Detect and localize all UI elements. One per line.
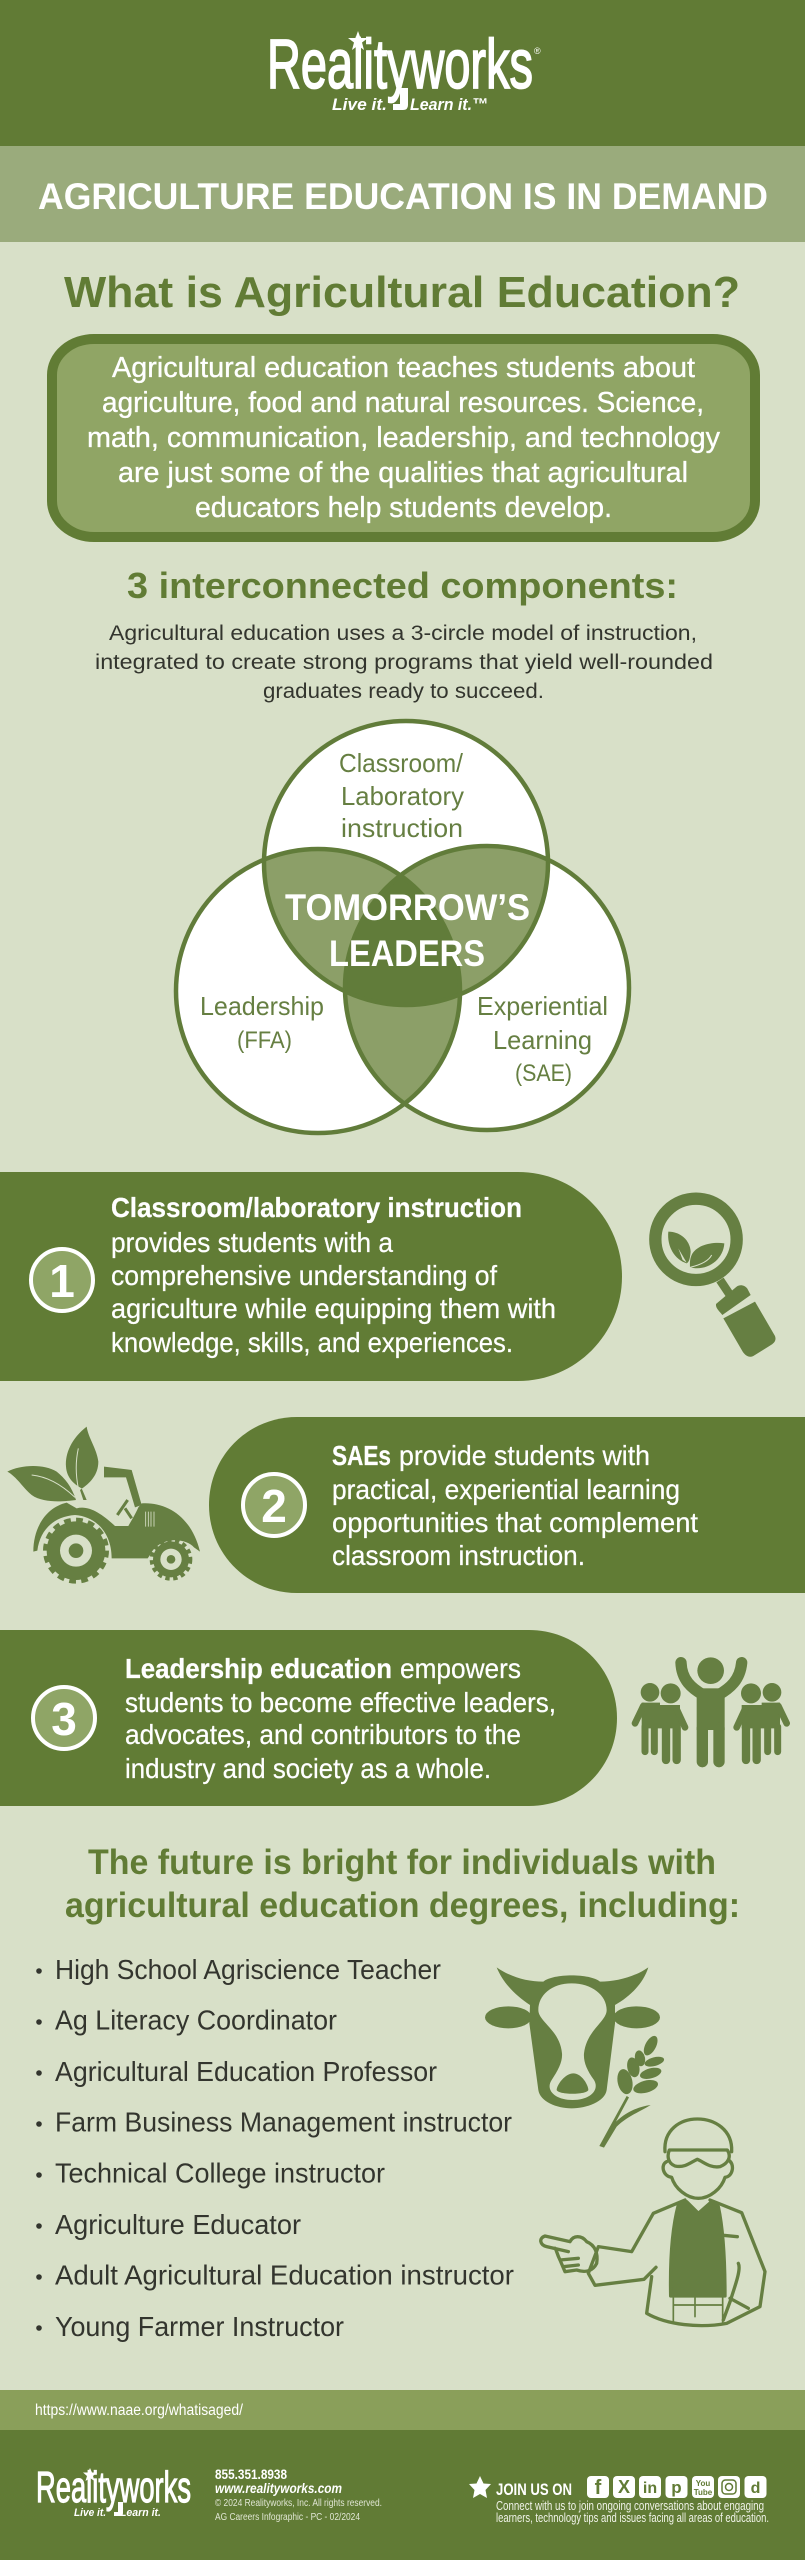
panel: step 2 (209, 1417, 805, 1593)
step 2 text: opportunities that complement (332, 1507, 698, 1538)
number badge 1: 1 (49, 1255, 75, 1307)
career list: Ag Literacy Coordinator (55, 2004, 337, 2036)
components intro text (95, 621, 713, 703)
social icons (587, 2476, 766, 2499)
logo: Realityworks: Learn it.™ (410, 95, 488, 114)
footer contact (215, 2466, 382, 2523)
icon: tractor with leaves (7, 1427, 200, 1581)
venn label: classroom: instruction (341, 813, 463, 843)
components intro text: integrated to create strong programs that yield well-rounded (95, 650, 713, 674)
footer (0, 2430, 805, 2560)
number badge 2: 2 (261, 1480, 287, 1532)
social icons: in (643, 2480, 657, 2497)
career list: Adult Agricultural Education instructor (55, 2260, 514, 2290)
step 1 text (111, 1192, 556, 1358)
step 2 text: practical, experiential learning (332, 1474, 680, 1505)
definition text: math, communication, leadership, and technology (87, 422, 720, 454)
number badge 3 (33, 1687, 95, 1749)
venn centre label (285, 887, 530, 974)
social icons: f (595, 2477, 602, 2499)
step 3 text: empowers (400, 1653, 521, 1684)
step 2 text (332, 1440, 698, 1571)
footer logo: Live it. (74, 2507, 106, 2519)
step 3 text: Leadership education (125, 1653, 392, 1684)
step 3 text (125, 1653, 556, 1784)
step 3 text: students to become effective leaders, (125, 1687, 556, 1718)
social icons: p (671, 2478, 682, 2497)
footer contact: 855.351.8938 (215, 2466, 287, 2482)
step 1 text: comprehensive understanding of (111, 1260, 497, 1291)
heading: the future is bright: agricultural education degrees, including: (65, 1886, 740, 1925)
venn label: experiential learning: (SAE) (515, 1060, 572, 1087)
logo: Realityworks (267, 25, 541, 114)
career list: Farm Business Management instructor (55, 2106, 512, 2138)
join us label: JOIN US ON (496, 2480, 572, 2499)
venn label: classroom (339, 748, 464, 843)
source url: https://www.naae.org/whatisaged/ (35, 2402, 244, 2419)
venn label: classroom: Classroom/ (339, 748, 464, 778)
number badge 3: 3 (51, 1693, 77, 1745)
header band with logo (0, 0, 805, 146)
footer logo: Realityworks (36, 2463, 191, 2512)
step 3 text: advocates, and contributors to the (125, 1719, 521, 1750)
components intro text: graduates ready to succeed. (263, 679, 544, 703)
venn label: experiential learning: Experiential (477, 991, 608, 1021)
icon: group of people (635, 1657, 787, 1762)
icon: wheat stalk (599, 2034, 665, 2148)
career list: Agriculture Educator (55, 2209, 301, 2240)
source link band (0, 2390, 805, 2430)
heading: What is Agricultural Education: What is Agricultural Education? (64, 268, 740, 317)
venn label: leadership (200, 991, 324, 1054)
footer contact: AG Careers Infographic - PC - 02/2024 (215, 2512, 360, 2523)
definition text: are just some of the qualities that agricultural (118, 457, 688, 489)
social icons: Tube (694, 2488, 713, 2497)
logo: Realityworks: ® (534, 46, 541, 56)
venn label: classroom: Laboratory (341, 781, 464, 811)
definition text (87, 352, 720, 524)
social icons: You (696, 2479, 710, 2488)
venn label: experiential learning (477, 991, 608, 1087)
social icons: d (751, 2480, 760, 2497)
heading: 3 interconnected components: 3 interconnected components: (127, 565, 678, 606)
title band (0, 146, 805, 242)
footer contact: www.realityworks.com (215, 2480, 342, 2496)
step 2 text: classroom instruction. (332, 1540, 585, 1571)
icon: farmer with goggles pointing (541, 2119, 765, 2326)
number badge 2 (243, 1474, 305, 1536)
footer logo: Learn it. (120, 2507, 161, 2519)
footer contact: © 2024 Realityworks, Inc. All rights reserved. (215, 2498, 382, 2509)
venn label: leadership: Leadership (200, 991, 324, 1021)
venn centre label: LEADERS (329, 933, 485, 974)
definition text: educators help students develop. (195, 492, 612, 524)
career list: Young Farmer Instructor (55, 2311, 344, 2342)
join us text (496, 2499, 769, 2525)
venn centre label: TOMORROW’S (285, 887, 530, 928)
career list: Agricultural Education Professor (55, 2056, 437, 2087)
step 1 text: provides students with a (111, 1227, 393, 1258)
logo: Realityworks: Realityworks (267, 25, 533, 103)
footer logo (36, 2463, 191, 2519)
step 3 text: industry and society as a whole. (125, 1753, 491, 1784)
panel: definition box (52, 339, 755, 537)
heading: the future is bright: The future is bright for individuals with (88, 1843, 716, 1882)
career list: Technical College instructor (55, 2158, 385, 2188)
heading: the future is bright (65, 1843, 740, 1925)
main title: AGRICULTURE EDUCATION IS IN DEMAND (38, 176, 768, 217)
career list (36, 1954, 514, 2342)
icon: star (469, 2476, 491, 2498)
social icons: X (618, 2477, 630, 2497)
venn label: experiential learning: Learning (493, 1025, 592, 1055)
definition text: agriculture, food and natural resources. Science, (102, 387, 704, 419)
step 1 text: knowledge, skills, and experiences. (111, 1327, 513, 1358)
step 2 text: provide students with (399, 1440, 650, 1471)
components intro text: Agricultural education uses a 3-circle model of instruction, (109, 621, 697, 645)
definition text: Agricultural education teaches students about (112, 352, 695, 384)
number badge 1 (31, 1249, 93, 1311)
step 2 text: SAEs (332, 1440, 391, 1471)
panel: step 1 (0, 1172, 622, 1381)
step 1 text: agriculture while equipping them with (111, 1293, 556, 1324)
career list: High School Agriscience Teacher (55, 1954, 441, 1985)
venn diagram (176, 721, 629, 1133)
logo: Realityworks: Live it. (332, 95, 387, 114)
venn label: leadership: (FFA) (237, 1027, 292, 1054)
panel: step 3 (0, 1630, 617, 1806)
icon: cow head (485, 1967, 660, 2108)
icon: magnifying glass with leaves (655, 1199, 776, 1357)
step 1 text: Classroom/laboratory instruction (111, 1192, 522, 1223)
